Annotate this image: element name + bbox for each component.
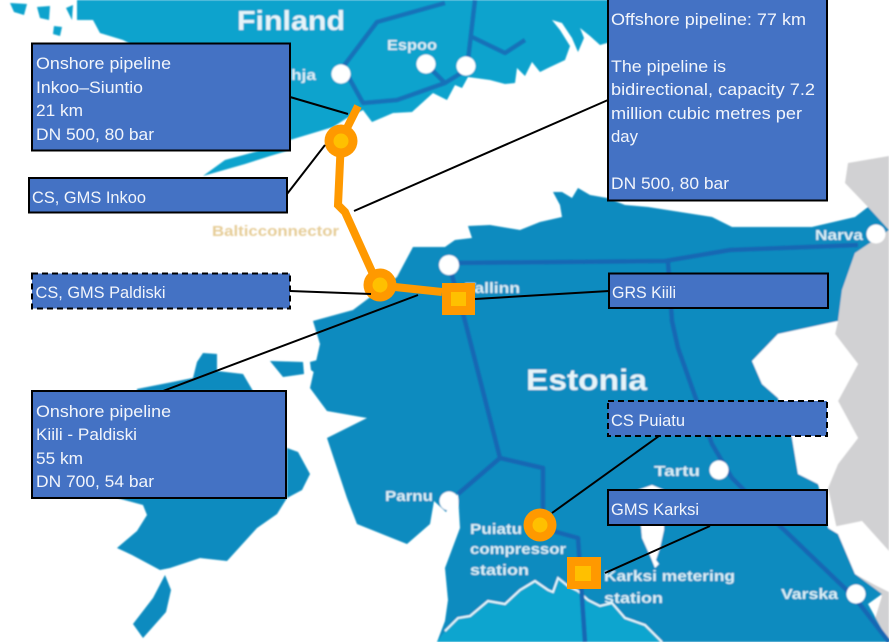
callout: onshore pipeline Kiili-Paldiski: Kiili - Paldiski (36, 425, 137, 444)
marker: Karksi station (567, 557, 601, 589)
pipeline route (338, 106, 442, 292)
map place names: Finland (237, 5, 345, 36)
network: Estonia east-west (449, 245, 858, 263)
region: Finnish island (203, 150, 290, 176)
map place names: Tartu (654, 463, 700, 480)
callout: offshore pipeline: The pipeline is (611, 57, 726, 76)
map place names: Karksi metering (604, 568, 735, 585)
map place names: Tallinn (465, 280, 520, 297)
callout: offshore pipeline (608, 0, 827, 200)
marker: Paldiski station (364, 268, 396, 302)
map place names: Narva (815, 227, 864, 244)
map place names: Estonia (526, 364, 647, 397)
callout: onshore pipeline Kiili-Paldiski (32, 391, 286, 498)
callout: GRS Kiili (609, 274, 828, 308)
callout: CS, GMS Inkoo: CS, GMS Inkoo (32, 188, 146, 207)
callout: offshore pipeline: day (611, 127, 638, 146)
island: Hiiumaa (137, 353, 253, 391)
leader lines (163, 97, 710, 573)
network: Estonia north-south (668, 262, 889, 642)
callout: CS, GMS Paldiski (planned): CS, GMS Paldiski (36, 283, 166, 302)
marker: Puiatu station (524, 508, 556, 542)
map place names: hja (291, 67, 317, 84)
callout: CS Puiatu (planned): CS Puiatu (611, 411, 685, 430)
callout: onshore pipeline Inkoo-Siuntio: Onshore pipeline (36, 54, 171, 73)
map place names: station (604, 590, 663, 607)
callout: onshore pipeline Inkoo-Siuntio: 21 km (36, 101, 83, 120)
callout: GRS Kiili: GRS Kiili (612, 283, 676, 302)
island: small islets (270, 358, 332, 378)
region: Russia in grey (828, 156, 889, 642)
callout: offshore pipeline: DN 500, 80 bar (611, 174, 729, 193)
region: Finland (77, 0, 820, 140)
map place names: Balticconnector (212, 223, 339, 240)
island: Sorve peninsula (133, 575, 171, 638)
map place names (212, 5, 864, 607)
map place names: Espoo (387, 37, 437, 54)
callout: CS, GMS Paldiski (planned) (32, 274, 290, 308)
network: Finland (343, 0, 525, 103)
region: Archipelago islets (10, 3, 73, 36)
map place names: Puiatu (470, 521, 522, 538)
callout: onshore pipeline Inkoo-Siuntio: Inkoo–Siuntio (36, 78, 143, 97)
callout: onshore pipeline Inkoo-Siuntio: DN 500, 80 bar (36, 125, 154, 144)
map place names: compressor (470, 541, 566, 558)
region: Lake Peipus and white land strip (752, 321, 889, 592)
callout: CS Puiatu (planned) (608, 401, 827, 436)
callout: onshore pipeline Kiili-Paldiski: Onshore pipeline (36, 402, 171, 421)
region: Latvia (437, 578, 662, 642)
island: Saaremaa (117, 448, 310, 570)
map place names: Varska (781, 586, 839, 603)
region: Estonia mainland (310, 188, 889, 642)
callout: onshore pipeline Kiili-Paldiski: DN 700, 54 bar (36, 472, 154, 491)
map place names: station (470, 562, 529, 579)
marker: Inkoo station (324, 124, 358, 158)
callout: offshore pipeline: million cubic metres per (611, 104, 802, 123)
gas network lines (343, 0, 889, 642)
callout: onshore pipeline Inkoo-Siuntio (32, 44, 290, 150)
callout: GMS Karksi: GMS Karksi (611, 500, 699, 519)
border: Estonia-Latvia (445, 578, 662, 642)
network: Tallinn-Puiatu-Karksi (449, 265, 585, 642)
callout: CS, GMS Inkoo (29, 178, 287, 212)
marker: Kiili station (442, 283, 475, 315)
lake: Vortsjarv (638, 485, 664, 568)
map place names: Parnu (385, 488, 433, 505)
callout: GMS Karksi (608, 490, 827, 525)
callout: onshore pipeline Kiili-Paldiski: 55 km (36, 449, 83, 468)
city dots (332, 54, 886, 604)
callout: offshore pipeline: Offshore pipeline: 77 km (611, 10, 806, 29)
callout: offshore pipeline: bidirectional, capacity 7.2 (611, 80, 815, 99)
